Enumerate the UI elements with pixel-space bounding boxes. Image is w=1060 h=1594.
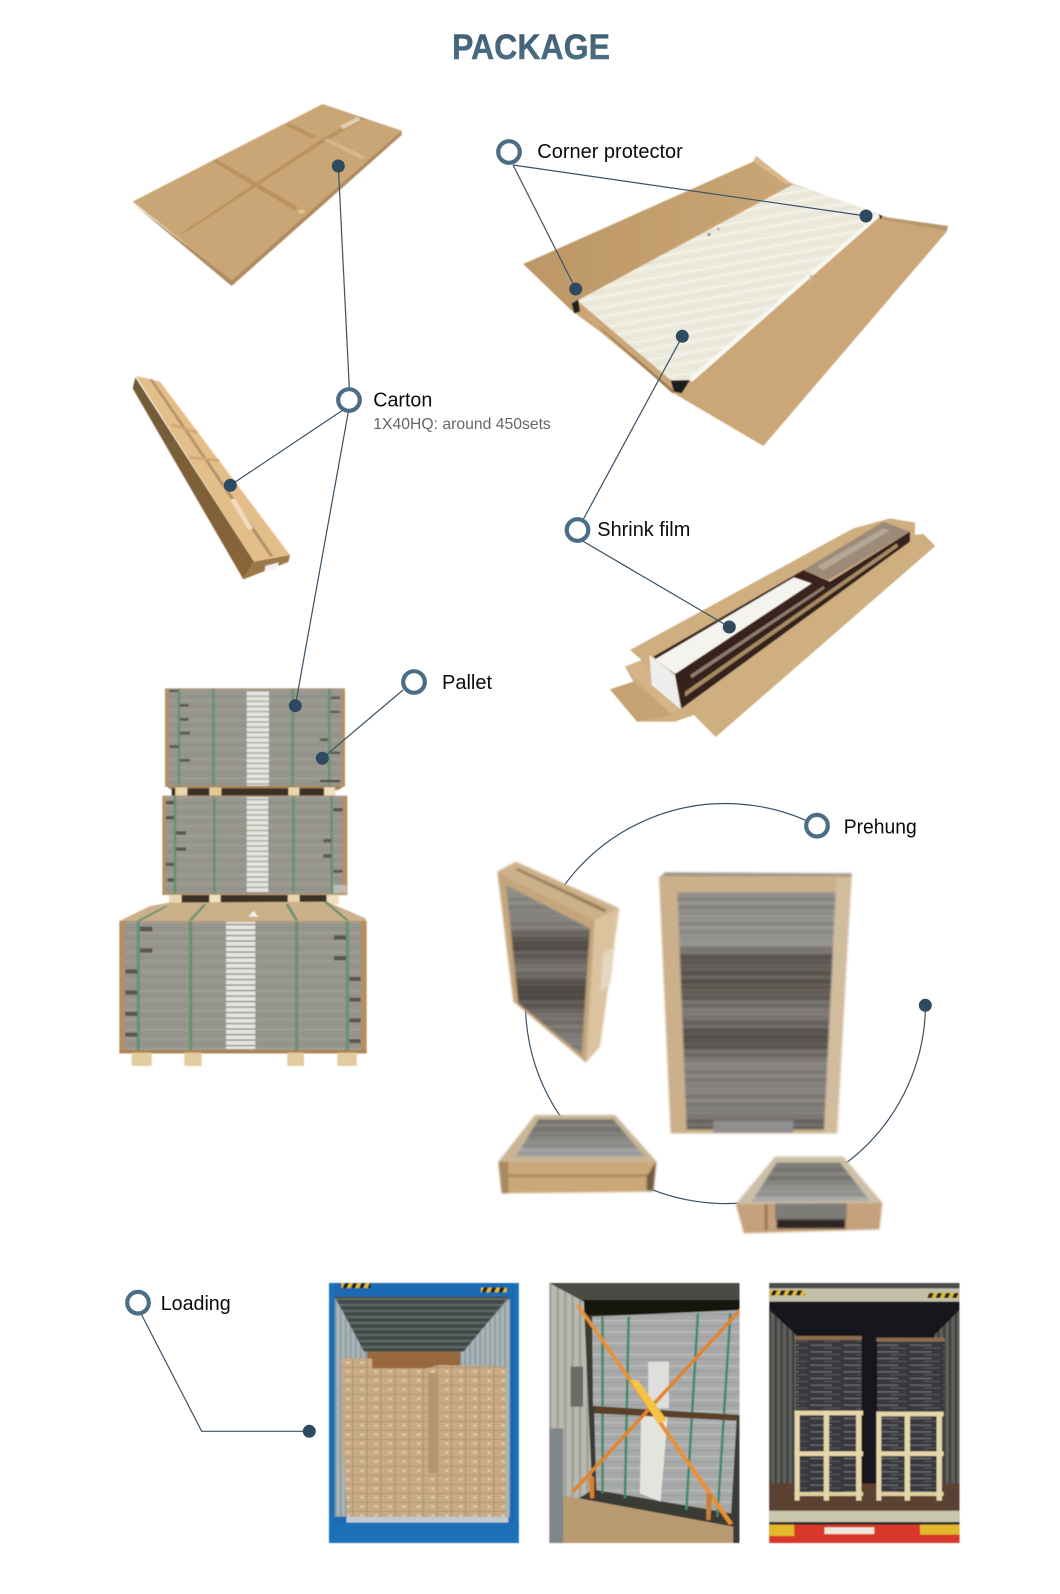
callout: Loading — [127, 1292, 316, 1438]
middle pallet — [162, 796, 347, 904]
photo: container loaded with cartons — [329, 1283, 519, 1543]
photo: prehung frame, tilted — [497, 862, 619, 1063]
callout: Carton — [224, 160, 551, 712]
callout: Carton: 1X40HQ: around 450sets — [373, 416, 551, 433]
callout: Loading: Loading — [161, 1293, 231, 1315]
photo: stacked pallets — [119, 688, 367, 1066]
callout: Pallet: Pallet — [442, 672, 492, 694]
callout: Prehung — [806, 815, 932, 1012]
photo: container with two pallets strapped — [549, 1283, 739, 1543]
callout: Shrink film — [567, 330, 736, 634]
photo: open carton with panel and corner protectors — [523, 156, 948, 446]
bottom pallet — [119, 902, 367, 1066]
photo: panel in shrink film on carton — [610, 518, 935, 737]
photo: prehung frame, lying right — [736, 1157, 882, 1233]
callout: Shrink film: Shrink film — [597, 519, 690, 541]
callout: Carton: Carton — [373, 390, 432, 412]
title: PACKAGE — [452, 28, 610, 67]
photo: container with two crates — [769, 1283, 959, 1543]
top pallet — [165, 688, 345, 796]
callout: Prehung: Prehung — [844, 816, 917, 838]
callout: Corner protector — [498, 141, 872, 296]
photo: prehung frame, lying left — [498, 1115, 657, 1193]
photo: flat carton — [133, 104, 402, 286]
photo: long carton on edge — [133, 376, 290, 579]
callout: Corner protector: Corner protector — [537, 141, 683, 163]
prehung arc leader — [526, 804, 926, 1204]
callout: Pallet — [316, 671, 492, 765]
photo: prehung frame, front view — [659, 872, 852, 1133]
